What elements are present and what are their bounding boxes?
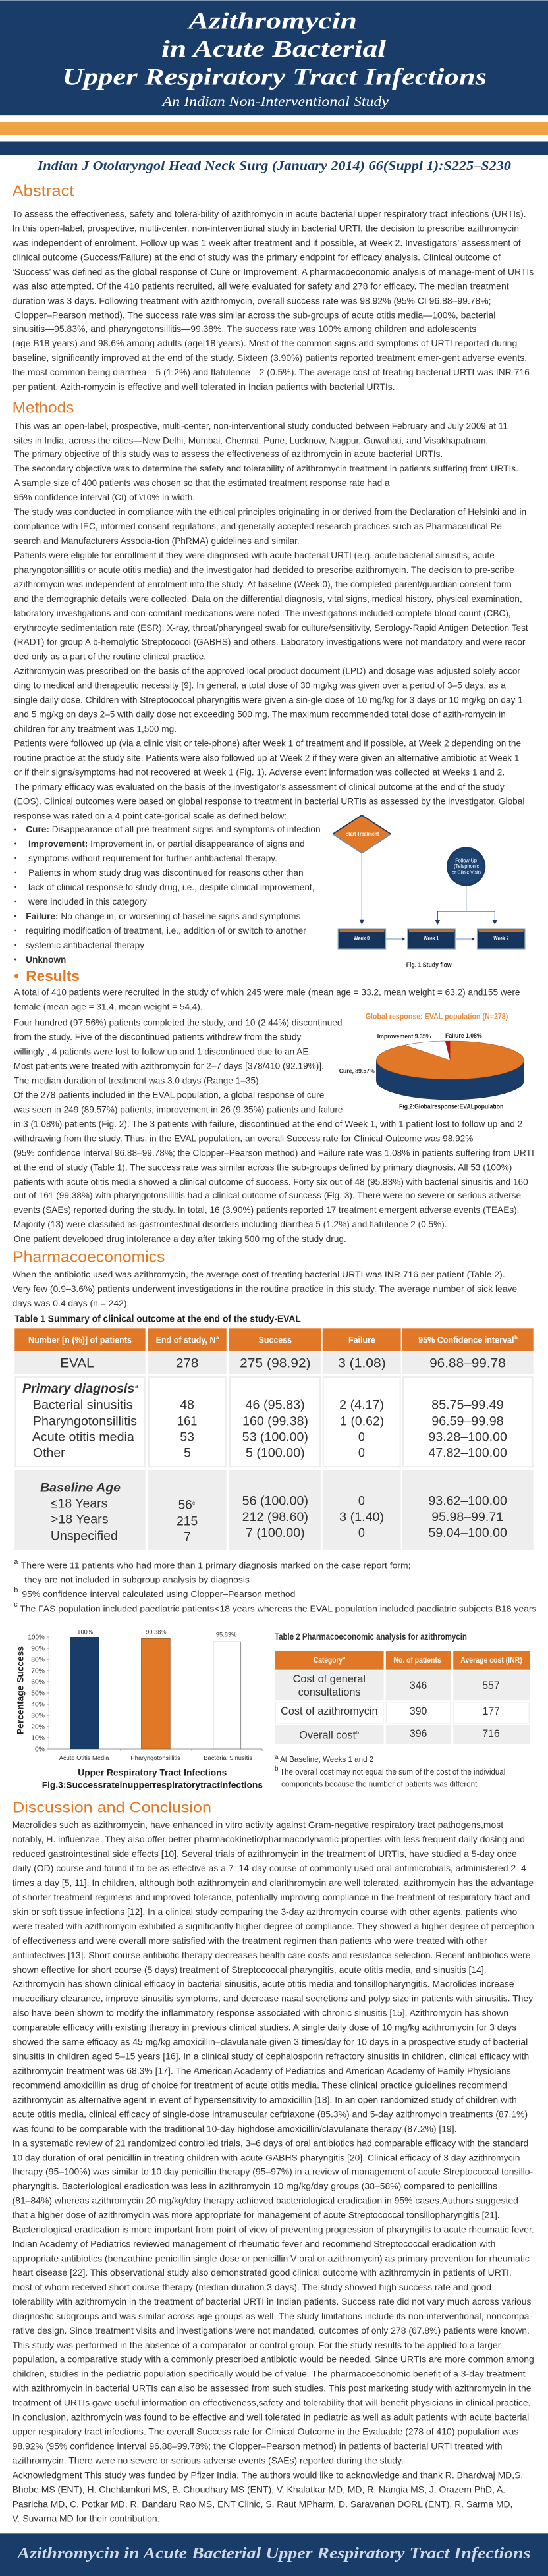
discussion text: diagnostic subgroups and was similar across age groups as well. The study limitations include its non-interventional, noncompa- [13, 2311, 532, 2321]
table 1 header row: a [216, 1335, 219, 1341]
table 1 primary diagnosis row: 0 [358, 1431, 365, 1445]
pie chart: global response [339, 1011, 524, 1110]
discussion text: antiinfectives [13]. Short course antibiotic therapy decreases health care costs and resistance selection. Recent antibiotics were [13, 1950, 531, 1960]
table 1 primary diagnosis row: 53 (100.00) [242, 1431, 308, 1445]
methods text: single daily dose. Children with Streptococcal pharyngitis were given a sin-gle dose of 10 mg/kg for 3 days or 10 mg/kg on day 1 [14, 694, 523, 705]
discussion text: 98.92% (95% confidence interval 96.88–99.78%; the Clopper–Pearson method) in patients of bacterial URTI treated with [13, 2440, 503, 2451]
outcome definitions bullet list [14, 824, 321, 965]
table 2 body rows [275, 1671, 530, 1744]
heading: abstract: Abstract [13, 182, 74, 200]
table 1 primary diagnosis row: 160 (99.38) [242, 1414, 308, 1428]
table 2 body rows: Overall cost [299, 1729, 356, 1742]
pie slice: improvement [405, 1041, 450, 1060]
table 1 header row: Success [259, 1334, 292, 1345]
week 2 box: Week 2 [493, 935, 509, 942]
outcome definitions bullet list: Failure: No change in, or worsening of baseline signs and symptoms [26, 911, 300, 921]
y axis labels: 50% [31, 1690, 45, 1698]
flow chart: study flow [333, 815, 525, 969]
table 1 baseline age row: Baseline Age [40, 1482, 121, 1495]
y axis labels: 70% [31, 1667, 45, 1675]
methods text: children for any treatment was 1,500 mg. [14, 723, 177, 734]
results text: at the end of study (Table 1). The success rate was similar across the sub-groups defined by primary diagnosis. All 53 (100%) [14, 1162, 512, 1172]
x axis labels [59, 1755, 252, 1762]
results text: out of 161 (99.38%) with pharyngotonsillitis had a clinical outcome of success (Fig. 3). There were no severe or serious adverse [14, 1190, 521, 1200]
figure 2 caption: Fig.2:Globalresponse:EVALpopulation [399, 1103, 503, 1110]
discussion text: of effectiveness and were overall more satisfied with the treatment regimen than patients who were treated with other [13, 1935, 487, 1946]
discussion text: most of whom received short course therapy (median duration 3 days). The study showed high success rate and good [13, 2282, 491, 2292]
outcome definitions bullet list: Patients in whom study drug was discontinued for reasons other than [28, 867, 304, 878]
table 1 primary diagnosis row: Pharyngotonsillitis [33, 1414, 137, 1428]
table 2 body rows: 390 [410, 1705, 427, 1717]
discussion text [12, 1819, 534, 2523]
follow up circle: (Telephonic [454, 863, 480, 869]
x axis labels: Pharyngotonsillitis [130, 1755, 180, 1762]
week 1 box [408, 929, 455, 949]
discussion text: Acknowledgment This study was funded by Pfizer India. The authors would like to acknowledge and thank R. Bhardwaj MD,S. [13, 2469, 523, 2480]
table 1 header row [14, 1328, 534, 1351]
pie labels: Cure, 89.57% [339, 1067, 375, 1075]
table 1 primary diagnosis row: 47.82–100.00 [428, 1447, 507, 1461]
table 1 header row: End of study, N [156, 1334, 215, 1345]
discussion text: notably, H. influenzae. They also offer better pharmacokinetic/pharmacodynamic properties with less frequent daily dosing and [13, 1834, 525, 1844]
pie labels: Failure 1.08% [445, 1033, 482, 1040]
table 2: pharmacoeconomic analysis [275, 1651, 530, 1744]
table 2 footnotes [275, 1754, 505, 1788]
discussion text: shown effective for short course (5 days) treatment of Streptococcal pharyngitis, acute otitis media, and sinusitis [14]. [13, 1964, 487, 1975]
table 1 title: Table 1 Summary of clinical outcome at the end of the study-EVAL [14, 1314, 301, 1324]
table 1 baseline age row: 212 (98.60) [242, 1511, 308, 1524]
table 1 primary diagnosis row: 5 (100.00) [246, 1447, 305, 1461]
table 1 baseline age row: 0 [358, 1526, 365, 1540]
table 1 primary diagnosis row: 1 (0.62) [340, 1414, 384, 1428]
week 0 box: Week 0 [354, 935, 370, 942]
pie slice: cure [376, 1041, 524, 1079]
abstract text: clinical outcome (Success/Failure) at the end of study was the primary endpoint for efficacy analysis. Clinical outcome of [13, 252, 501, 262]
table 1 baseline age row: 0 [358, 1494, 365, 1508]
results text: events (SAEs) reported during the study. In total, 16 (3.90%) patients reported 17 treatment emergent adverse events (TEAEs). [14, 1204, 519, 1215]
methods text: ded only as a part of the routine clinical practice. [14, 651, 206, 661]
discussion text: In conclusion, azithromycin was found to be effective and well tolerated in pediatric as well as adult patients with acute bacterial [13, 2411, 529, 2422]
table 1 primary diagnosis row: a [135, 1383, 138, 1389]
x axis labels: Bacterial Sinusitis [204, 1755, 252, 1762]
pharmacoeconomics text [13, 1269, 518, 1308]
abstract text: per patient. Azith-romycin is effective and well tolerated in Indian patients with bacterial URTIs. [13, 381, 395, 392]
table 1 header row: b [514, 1335, 518, 1341]
table 1 primary diagnosis row: 2 (4.17) [339, 1398, 384, 1412]
orange band [0, 122, 548, 135]
discussion text: This study was performed in the absence of a comparator or control group. For the study results to be applied to a larger [13, 2340, 501, 2350]
methods text: azithromycin was independent of enrolment into the study. At baseline (Week 0), the completed parent/guardian consent form [14, 579, 512, 589]
methods text: sites in India, across the cities—New Delhi, Mumbai, Chennai, Pune, Lucknow, Nagpur, Guwahati, and Visakhapatnam. [14, 435, 488, 445]
table 2 body rows: b [356, 1731, 359, 1736]
table 2 body rows: 396 [410, 1727, 427, 1740]
methods text: response was rated on a 4 point cate-gorical scale as defined below: [14, 810, 287, 820]
discussion text: showed the same efficacy as 45 mg/kg amoxicillin–clavulanate given 3 times/day for 10 days in a prospective study of bacterial [13, 2036, 528, 2047]
title: Upper Respiratory Tract Infections [62, 63, 487, 90]
results text: willingly , 4 patients were lost to follow up and 1 discontinued due to an AE. [13, 1046, 311, 1056]
results text: female (mean age = 31.4, mean weight = 54.4). [14, 1001, 203, 1011]
table 1 EVAL row [14, 1352, 534, 1374]
outcome definitions bullet list: Improvement: Improvement in, or partial disappearance of signs and [28, 838, 305, 849]
table 1 header row: Number [n (%)] of patients [28, 1334, 132, 1345]
table 1 EVAL row: 96.88–99.78 [429, 1357, 506, 1371]
table 1 footnotes [14, 1558, 537, 1613]
outcome definitions bullet list: symptoms without requirement for further antibacterial therapy. [28, 853, 277, 863]
bar: pharyngotonsillitis [141, 1638, 170, 1749]
results text: patients with acute otitis media showed a clinical outcome of success. Forty six out of 48 (95.83%) with bacterial sinusitis and 160 [14, 1176, 528, 1187]
results text: in 3 (1.08%) patients (Fig. 2). The 3 patients with failure, discontinued at the end of Week 1, with 1 patient lost to follow up and 2 [14, 1118, 522, 1129]
pharmacoeconomics text: When the antibiotic used was azithromycin, the average cost of treating bacterial URTI was INR 716 per patient (Table 2). [13, 1269, 505, 1279]
table 1 footnotes: c [14, 1601, 18, 1609]
methods text: search and Manufacturers Associa-tion (PhRMA) guidelines and similar. [14, 535, 300, 546]
table 2 footnotes: At Baseline, Weeks 1 and 2 [280, 1755, 373, 1764]
discussion text: In a systematic review of 21 randomized controlled trials, 3–6 days of oral antibiotics had comparable efficacy with the standard [13, 2137, 528, 2148]
table 1 EVAL row: 3 (1.08) [338, 1357, 386, 1371]
table 2 header row: a [342, 1656, 345, 1661]
y axis labels: 80% [31, 1655, 45, 1663]
discussion text: (81–84%) whereas azithromycin 20 mg/kg/day therapy achieved bacteriological eradication in 95% cases.Authors suggested [13, 2195, 518, 2206]
abstract text: was independent of enrolment. Follow up was 1 week after treatment and if possible, at Week 2. Investigators’ assessment of [12, 237, 521, 248]
table 2 body rows: 346 [410, 1679, 427, 1692]
bar chart: success rate [14, 1629, 263, 1790]
table 1 baseline age row: c [192, 1500, 195, 1506]
results text: Four hundred (97.56%) patients completed the study, and 10 (2.44%) discontinued [14, 1017, 342, 1027]
footer banner: Azithromycin in Acute Bacterial Upper Respiratory Tract Infections [16, 2545, 530, 2562]
methods text: routine practice at the study site. Patients were also followed up at Week 2 if they were given an alternative antibiotic at Week 1 [14, 752, 520, 763]
outcome definitions bullet list: requiring modification of treatment, i.e., addition of or switch to another [26, 925, 306, 936]
table 1 primary diagnosis row: Acute otitis media [32, 1431, 134, 1445]
table 2 title: Table 2 Pharmacoeconomic analysis for azithromycin [275, 1632, 467, 1642]
pharmacoeconomics text: days was 0.4 days (n = 242). [13, 1298, 129, 1308]
table 1 baseline age row: 7 (100.00) [246, 1526, 305, 1540]
bar value labels [77, 1629, 237, 1639]
methods text: and 5 mg/kg on days 2–5 with daily dose not exceeding 500 mg. The maximum recommended total dose of azith-romycin in [14, 709, 506, 719]
methods text: compliance with IEC, informed consent regulations, and generally accepted research practices such as Pharmaceutical Re [14, 521, 502, 531]
table 1 baseline age row [14, 1470, 534, 1550]
discussion text: rative design. Since treatment visits and investigations were not mandated, outcomes of only 278 (67.8%) patients were known. [13, 2325, 530, 2336]
table 2 body rows: 177 [483, 1705, 500, 1717]
pie labels [339, 1033, 482, 1075]
discussion text: Macrolides such as azithromycin, have enhanced in vitro activity against Gram-negative respiratory tract pathogens,most [13, 1819, 503, 1830]
table 2 body rows: Cost of azithromycin [281, 1705, 378, 1717]
discussion text: were treated with azithromycin exhibited a significantly higher degree of compliance. They showed a higher degree of perception [12, 1921, 534, 1931]
pie slice: failure [445, 1041, 450, 1060]
table 1 baseline age row: Unspecified [51, 1529, 118, 1543]
discussion text: that a higher dose of azithromycin was more appropriate for management of acute Streptococcal tonsillopharyngitis [21]. [13, 2210, 500, 2220]
x axis title: Upper Respiratory Tract Infections [78, 1767, 227, 1778]
outcome definitions bullet list: systemic antibacterial therapy [26, 940, 144, 950]
table 2 body rows: 557 [482, 1679, 500, 1692]
y axis labels: 0% [35, 1745, 45, 1753]
pie chart title: Global response: EVAL population (N=278) [366, 1011, 508, 1021]
table 1 baseline age row: 56 (100.00) [242, 1494, 308, 1508]
discussion text: V. Suvarna MD for their contribution. [13, 2513, 159, 2523]
discussion text: also have been shown to modify the inflammatory response associated with chronic sinusitis [15]. Azithromycin has shown [13, 2007, 508, 2018]
table 1 footnotes: a [14, 1558, 18, 1566]
abstract text: duration was 3 days. Following treatment with azithromycin, overall success rate was 98.92% (95% CI 96.88–99.78%; [13, 295, 491, 306]
table 1 primary diagnosis row: 0 [358, 1447, 365, 1461]
table 1 EVAL row: 275 (98.92) [240, 1357, 311, 1371]
discussion text: mucociliary clearance, improve sinusitis symptoms, and decrease nasal secretions and polyp size in patients with sinusitis. They [13, 1993, 533, 2003]
table 1 primary diagnosis row: 85.75–99.49 [431, 1398, 504, 1412]
discussion text: times a day [5, 11]. In children, although both azithromycin and clarithromycin are well tolerated, azithromycin has the advantage [13, 1877, 534, 1888]
figure 1 caption: Fig. 1 Study flow [406, 961, 452, 969]
heading: discussion and conclusion: Discussion and Conclusion [13, 1798, 211, 1815]
methods text: (EOS). Clinical outcomes were based on global response to treatment in bacterial URTIs as assessed by the investigator. Global [14, 795, 524, 806]
methods text: The secondary objective was to determine the safety and tolerability of azithromycin treatment in patients suffering from URTIs. [14, 463, 518, 473]
heading: methods: Methods [13, 399, 74, 416]
methods text: ding to medical and therapeutic necessity [9]. In general, a total dose of 30 mg/kg was given over a period of 3–5 days, as a [14, 680, 506, 690]
table 1 footnotes: The FAS population included paediatric patients<18 years whereas the EVAL population included paediatric subjects B18 years [20, 1603, 537, 1613]
subtitle: An Indian Non-Interventional Study [161, 94, 389, 109]
y axis labels: 100% [28, 1633, 45, 1641]
discussion text: with azithromycin in bacterial URTIs can also be assessed from such studies. This post marketing study with azithromycin in the [12, 2382, 532, 2393]
results text: withdrawing from the study. Thus, in the EVAL population, an overall Success rate for Clinical Outcome was 98.92% [13, 1133, 473, 1143]
y axis labels: 10% [31, 1734, 45, 1742]
results text: was seen in 249 (89.57%) patients, improvement in 26 (9.35%) patients and failure [13, 1104, 343, 1114]
title: in Acute Bacterial [161, 36, 386, 62]
footer banner [0, 2533, 548, 2576]
y axis title: Percentage Success [14, 1646, 25, 1734]
table 1 primary diagnosis row: 46 (95.83) [245, 1398, 305, 1412]
results text [13, 986, 534, 1244]
navy band [0, 141, 548, 155]
table 1 baseline age row: 59.04–100.00 [428, 1526, 507, 1540]
discussion text: treatment of URTIs gave useful information on effectiveness,safety and tolerability that will benefit physicians in clinical practice. [13, 2397, 531, 2407]
figure 3 caption: Fig.3:Successrateinupperrespiratorytractinfections [42, 1780, 263, 1790]
x axis labels: Acute Otitis Media [59, 1755, 109, 1762]
table 1 baseline age row: 95.98–99.71 [431, 1511, 503, 1524]
pie side [376, 1060, 524, 1100]
methods text: Azithromycin was prescribed on the basis of the approved local product document (LPD) and dosage was adjusted solely accor [14, 665, 520, 676]
results text: Most patients were treated with azithromycin for 2–7 days [378/410 (92.19%)]. [14, 1060, 324, 1071]
table 1 footnotes: they are not included in subgroup analysis by diagnosis [24, 1574, 250, 1584]
pie labels: Improvement 9.35% [377, 1033, 431, 1040]
discussion text: Bhobe MS (ENT), H. Chehlamkuri MS, B. Choudhary MS (ENT), V. Khalatkar MD, MD, R. Nangia MS, J. Orazem PhD, A. [13, 2484, 505, 2494]
arrows to week 1 and week 2 [435, 886, 497, 925]
table 1 primary diagnosis row: 93.28–100.00 [428, 1431, 507, 1445]
discussion text: appropriate antibiotics (benzathine penicillin single dose or penicillin V oral or azithromycin) as primary prevention for rheumatic [13, 2253, 530, 2264]
table 1 baseline age row: 3 (1.40) [339, 1511, 384, 1524]
discussion text: pharyngitis. Bacteriological eradication was less in azithromycin 10 mg/kg/day groups (38–58%) compared to penicillins [13, 2181, 497, 2191]
y axis labels: 30% [31, 1712, 45, 1720]
week 2 box [477, 929, 525, 949]
discussion text: acute otitis media, clinical efficacy of single-dose intramuscular ceftriaxone (85.3%) and 5-day azithromycin treatments (87.1%) [13, 2108, 528, 2119]
results text: One patient developed drug intolerance a day after taking 500 mg of the study drug. [14, 1233, 346, 1244]
bar value labels: 100% [77, 1629, 94, 1636]
outcome definitions bullet list: Cure: Disappearance of all pre-treatment signs and symptoms of infection [26, 824, 321, 834]
table 1 header row: Failure [348, 1334, 375, 1345]
methods text: Patients were eligible for enrollment if they were diagnosed with acute bacterial URTI (e.g. acute bacterial sinusitis, acute [14, 550, 495, 560]
bar: acute otitis media [70, 1637, 99, 1749]
abstract text: sinusitis—95.83%, and pharyngotonsillitis—99.38%. The success rate was 100% among children and adolescents [13, 323, 476, 334]
discussion text: of shorter treatment regimens and improved tolerance, potentially improving compliance in the treatment of respiratory tract and [13, 1892, 530, 1902]
results text: Of the 278 patients included in the EVAL population, a global response of cure [14, 1089, 325, 1100]
methods text: A sample size of 400 patients was chosen so that the estimated treatment response rate had a [14, 477, 390, 488]
methods text: The primary objective of this study was to assess the effectiveness of azithromycin in acute bacterial URTIs. [14, 448, 443, 459]
start treatment diamond [333, 815, 391, 853]
follow up circle [447, 847, 485, 886]
methods text: Patients were followed up (via a clinic visit or tele-phone) after Week 1 of treatment and if possible, at Week 2 depending on the [14, 738, 521, 748]
discussion text: tolerability with azithromycin in the treatment of bacterial URTI in Indian patients. Success rate did not vary much across various [13, 2296, 532, 2307]
table 1 footnotes: 95% confidence interval calculated using Clopper–Pearson method [22, 1589, 295, 1599]
abstract text: Clopper–Pearson method). The success rate was similar across the sub-groups of acute otitis media—100%, bacterial [14, 309, 495, 320]
results text: Majority (13) were classified as gastrointestinal disorders including-diarrhea 5 (1.2%) and flatulence 2 (0.5%). [14, 1219, 447, 1229]
abstract text: In this open-label, prospective, multi-center, non-interventional study in bacterial URTI, the decision to prescribe azithromycin [13, 223, 519, 233]
y axis labels [28, 1633, 45, 1753]
methods text: The study was conducted in compliance with the ethical principles originating in or derived from the Declaration of Helsinki and in [14, 506, 526, 517]
heading: results: Results [26, 967, 80, 984]
table 2 body rows: consultations [298, 1686, 361, 1698]
abstract text: the most common being diarrhea—5 (1.2%) and flatulence—2 (0.5%). The average cost of treating bacterial URTI was INR 716 [13, 367, 530, 377]
table 1 primary diagnosis row: 96.59–99.98 [431, 1414, 504, 1428]
week 1 box: Week 1 [424, 935, 439, 942]
axes [47, 1637, 262, 1751]
week 0 box [338, 929, 386, 949]
results text: A total of 410 patients were recruited in the study of which 245 were male (mean age = 33.2, mean weight = 63.2) and155 were [14, 986, 520, 997]
arrow to week 0 [360, 853, 364, 925]
abstract text [12, 208, 534, 392]
discussion text: sinusitis in children aged 5–15 years [16]. In a clinical study of cephalosporin refractory sinusitis in children, clinical efficacy with [13, 2051, 529, 2061]
discussion text: Pasricha MD, C. Potkar MD, R. Bandaru Rao MS, ENT Clinic, S. Raut MPharm, D. Saravanan DORL (ENT), R. Sarma MD, [13, 2498, 512, 2509]
methods text: or if their signs/symptoms had not recovered at Week 1 (Fig. 1). Adverse event information was collected at Weeks 1 and 2. [14, 766, 505, 777]
table 2 footnotes: components because the number of patients was different [281, 1779, 478, 1788]
methods text: laboratory investigations and con-comitant medications were noted. The investigations included complete blood count (CBC), [14, 608, 511, 618]
outcome definitions bullet list: lack of clinical response to study drug, i.e., despite clinical improvement, [28, 882, 315, 892]
y axis labels: 60% [31, 1678, 45, 1686]
table 1 EVAL row: EVAL [60, 1357, 94, 1371]
table 1 primary diagnosis row: Bacterial sinusitis [33, 1398, 133, 1412]
table 2 footnotes: a [275, 1754, 279, 1761]
abstract text: baseline, significantly improved at the end of the study. Sixteen (3.90%) patients reported treatment emer-gent adverse events, [13, 352, 527, 363]
outcome definitions bullet list: were included in this category [28, 896, 147, 907]
pharmacoeconomics text: Very few (0.9–3.6%) patients underwent investigations in the routine practice in this study. The average number of sick leave [13, 1283, 518, 1294]
table 1 baseline age row: ≤18 Years [51, 1497, 107, 1511]
abstract text: (age B18 years) and 98.6% among adults (age[18 years). Most of the common signs and symptoms of URTI reported during [13, 338, 517, 348]
table 2 footnotes: b [275, 1765, 279, 1773]
discussion text: children, studies in the pediatric population specifically would be of value. The pharmacoeconomic benefit of a 3-day treatment [13, 2368, 526, 2378]
y axis labels: 40% [31, 1700, 45, 1708]
discussion text: 10 day duration of oral penicillin in treating children with acute GABHS pharyngitis [20]. Clinical efficacy of 3 day azithromycin [13, 2152, 520, 2162]
y axis labels: 90% [31, 1645, 45, 1653]
discussion text: comparable efficacy with existing therapy in previous clinical studies. A single daily dose of 10 mg/kg azithromycin for 3 days [13, 2022, 516, 2032]
discussion text: heart disease [22]. This observational study also demonstrated good clinical outcome with azithromycin in patients of URTI, [13, 2267, 512, 2278]
table 1 primary diagnosis row: Primary diagnosis [22, 1382, 134, 1396]
discussion text: azithromycin as alternative agent in event of hypersensitivity to amoxicillin [18]. In an open randomized study of children with [13, 2094, 517, 2105]
table 1: clinical outcome [14, 1328, 534, 1550]
heading: pharmacoeconomics: Pharmacoeconomics [13, 1248, 165, 1266]
discussion text: therapy (95–100%) was similar to 10 day penicillin therapy (95–97%) in a review of management of acute Streptococcal tonsillo- [13, 2166, 534, 2177]
abstract text: was also attempted. Of the 410 patients recruited, all were evaluated for safety and 278 for efficacy. The median treatment [12, 281, 509, 291]
results text: The median duration of treatment was 3.0 days (Range 1–35). [14, 1075, 261, 1085]
table 1 primary diagnosis row: 161 [177, 1414, 197, 1428]
discussion text: azithromycin treatment was 68.3% [17]. The American Academy of Pediatrics and American Academy of Family Physicians [13, 2065, 511, 2076]
methods text: and the demographic details were collected. Data on the differential diagnosis, vital signs, medical history, physical examination, [14, 593, 522, 604]
results text: from the study. Five of the discontinued patients withdrew from the study [14, 1031, 301, 1042]
methods text: (RADT) for group A b-hemolytic Streptococci (GABHS) and others. Laboratory investigations were not mandatory and were recor [14, 636, 526, 647]
y axis labels: 20% [31, 1723, 45, 1731]
discussion text: recommend amoxicillin as drug of choice for treatment of acute otitis media. These clinical practice guidelines recommend [13, 2080, 507, 2090]
table 1 primary diagnosis row: 48 [180, 1398, 194, 1412]
week connectors [386, 938, 475, 940]
table 1 baseline age row: 215 [177, 1515, 198, 1529]
journal citation: Indian J Otolaryngol Head Neck Surg (January 2014) 66(Suppl 1):S225–S230 [37, 159, 511, 173]
results text: (95% confidence interval 96.88–99.78%; the Clopper–Pearson method) and Failure rate was 1.08% in patients suffering from URTI [14, 1147, 534, 1158]
start treatment diamond: Start Treatment [346, 830, 379, 837]
table 1 primary diagnosis row: 53 [180, 1431, 194, 1445]
bar value labels: 95.83% [216, 1632, 237, 1639]
discussion text: Bacteriological eradication is more important from point of view of preventing progression of pharyngitis to acute rheumatic fever. [13, 2224, 534, 2235]
discussion text: was found to be comparable with the traditional 10-day highdose amoxicillin/clavulanate therapy (87.2%) [19]. [12, 2123, 456, 2133]
table 1 footnotes: There were 11 patients who had more than 1 primary diagnosis marked on the case report form; [21, 1561, 411, 1570]
header banner [0, 0, 548, 116]
abstract text: ‘Success’ was defined as the global response of Cure or Improvement. A pharmacoeconomic analysis of manage-ment of URTIs [13, 266, 534, 277]
discussion text: azithromycin. There were no severe or serious adverse events (SAEs) reported during the study. [13, 2455, 404, 2465]
table 2 header row: Average cost (INR) [460, 1655, 522, 1665]
discussion text: Indian Academy of Pediatrics reviewed management of rheumatic fever and recommend Streptococcal eradication with [13, 2239, 495, 2249]
table 1 footnotes: b [14, 1586, 18, 1594]
methods text: The primary efficacy was evaluated on the basis of the investigator’s assessment of clinical outcome at the end of the study [14, 781, 505, 792]
discussion text: Azithromycin has shown clinical efficacy in bacterial sinusitis, acute otitis media and tonsillopharyngitis. Macrolides increase [13, 1978, 514, 1989]
table 2 body rows: 716 [482, 1727, 500, 1740]
table 2 body rows: Cost of general [293, 1673, 366, 1685]
table 2 header row [275, 1651, 530, 1670]
bar: bacterial sinusitis [213, 1642, 241, 1749]
discussion text: daily (OD) course and found it to be as effective as a 7–14-day course of commonly used oral antimicrobials, administered 2–4 [13, 1863, 526, 1873]
abstract text: To assess the effectiveness, safety and tolera-bility of azithromycin in acute bacterial upper respiratory tract infections (URTIs). [13, 208, 526, 219]
table 1 header row: 95% Confidence interval [418, 1334, 514, 1345]
bar value labels: 99.38% [146, 1629, 167, 1636]
title [62, 7, 487, 90]
table 2 footnotes: The overall cost may not equal the sum of the cost of the individual [280, 1767, 505, 1777]
table 1 primary diagnosis row [15, 1377, 533, 1466]
methods text: This was an open-label, prospective, multi-center, non-interventional study conducted between February and July 2009 at 11 [14, 420, 508, 431]
table 2 header row: Category [314, 1655, 342, 1665]
table 2 header row: No. of patients [394, 1655, 441, 1665]
table 1 primary diagnosis row: 5 [184, 1447, 191, 1461]
table 1 primary diagnosis row: Other [33, 1447, 65, 1461]
table 1 baseline age row: 93.62–100.00 [428, 1494, 507, 1508]
methods text: 95% confidence interval (CI) of \10% in width. [14, 492, 195, 502]
table 1 baseline age row: 56 [178, 1499, 192, 1513]
outcome definitions bullet list: Unknown [26, 954, 66, 965]
methods text [14, 420, 528, 820]
discussion text: upper respiratory tract infections. The overall Success rate for Clinical Outcome in the Evaluable (278 of 410) population was [13, 2426, 518, 2436]
table 1 EVAL row: 278 [176, 1357, 198, 1371]
follow up circle: Follow Up [455, 857, 477, 863]
table 1 baseline age row: >18 Years [51, 1513, 108, 1526]
discussion text: reduced gastrointestinal side effects [10]. Several trials of azithromycin in the treatment of URTIs, have studied a 5-day once [13, 1848, 517, 1859]
discussion text: population, a comparative study with a commonly prescribed antibiotic would be needed. Since URTIs are more common among [13, 2353, 534, 2364]
discussion text: skin or soft tissue infections [12]. In a clinical study comparing the 3-day azithromycin course with other agents, patients who [13, 1906, 518, 1917]
title: Azithromycin [187, 7, 357, 34]
follow up circle: or Clinic Visit) [452, 869, 481, 875]
table 1 baseline age row: 7 [184, 1530, 191, 1544]
methods text: erythrocyte sedimentation rate (ESR), X-ray, throat/pharyngeal swab for culture/sensitivity, Serology-Rapid Antigen Detection Test [14, 622, 528, 633]
methods text: pharyngotonsillitis or acute otitis media) and the investigator had decided to prescribe azithromycin. The decision to pre-scribe [14, 564, 514, 575]
